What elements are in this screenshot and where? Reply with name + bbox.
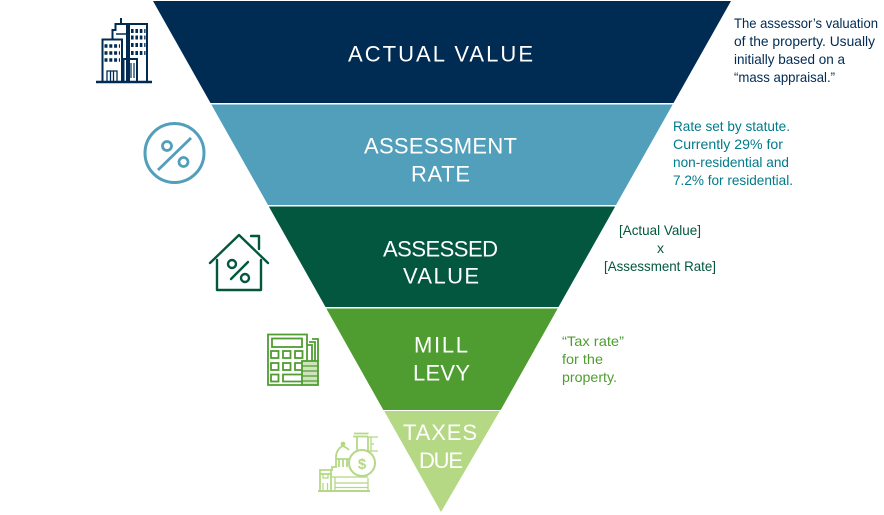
icon: capitol and money bag xyxy=(318,434,378,491)
funnel band: mill levy: MILL xyxy=(414,332,468,358)
funnel band: taxes due: TAXES xyxy=(403,420,477,445)
description: actual value: “mass appraisal.” xyxy=(734,70,835,85)
icon: house with percent xyxy=(210,235,268,290)
description: actual value: The assessor’s valuation xyxy=(734,16,878,31)
icon: capitol and money bag: $ xyxy=(358,456,367,473)
description: actual value: of the property. Usually xyxy=(734,34,875,49)
icon: calculator and bills xyxy=(268,334,318,385)
funnel band: assessed value xyxy=(269,206,615,307)
funnel band: assessed value: VALUE xyxy=(403,264,479,288)
description: assessment rate: Rate set by statute. xyxy=(673,119,790,134)
funnel band: actual value xyxy=(153,1,731,103)
funnel band: taxes due xyxy=(384,411,500,512)
icon: percent circle xyxy=(145,124,204,182)
funnel band: mill levy xyxy=(326,308,558,410)
description: assessed value formula xyxy=(604,223,716,274)
description: assessment rate: 7.2% for residential. xyxy=(673,173,793,188)
description: mill levy xyxy=(562,334,624,385)
icon: city buildings xyxy=(96,18,152,82)
funnel band: assessment rate xyxy=(211,104,673,205)
description: mill levy: for the xyxy=(562,352,603,367)
funnel band: assessment rate: RATE xyxy=(411,162,470,186)
funnel band: taxes due: DUE xyxy=(419,448,463,473)
description: assessment rate: Currently 29% for xyxy=(673,137,783,152)
funnel band: actual value: ACTUAL VALUE xyxy=(348,42,533,66)
description: actual value: initially based on a xyxy=(734,52,845,67)
funnel band: assessed value: ASSESSED xyxy=(383,236,498,262)
description: assessed value formula: [Actual Value] xyxy=(619,223,701,238)
description: assessment rate: non-residential and xyxy=(673,155,789,170)
description: assessed value formula: x xyxy=(657,241,664,256)
funnel band: mill levy: LEVY xyxy=(413,360,470,386)
description: assessed value formula: [Assessment Rate] xyxy=(604,259,716,274)
description: mill levy: property. xyxy=(562,370,617,385)
description: mill levy: “Tax rate” xyxy=(562,334,624,349)
funnel band: assessment rate: ASSESSMENT xyxy=(364,134,517,158)
description: actual value xyxy=(734,16,878,85)
description: assessment rate xyxy=(673,119,793,188)
